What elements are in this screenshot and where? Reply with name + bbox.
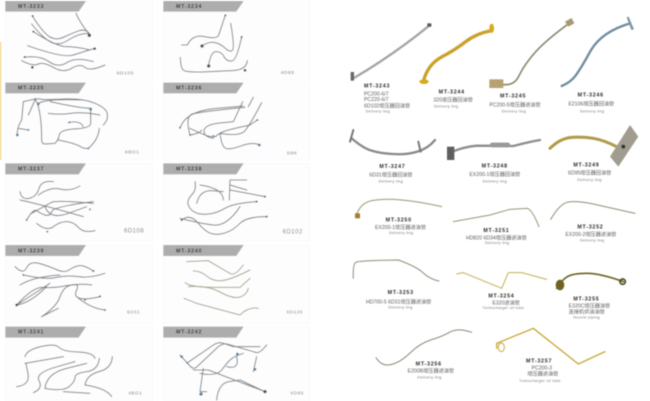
item: MT-3254 [457,273,547,310]
item: MT-3254: Turbocharger oil tube [482,306,524,310]
panel: MT-3239 [5,245,153,323]
item: MT-3257: 增压器进油管 [527,370,558,378]
panel: MT-3234 [163,1,310,80]
item: MT-3243: PC200-6/7 [364,91,389,97]
item: MT-3250 [355,199,442,235]
item: MT-3253: MT-3253 [388,290,414,296]
item: MT-3250: Delivery ling [389,231,413,235]
item: MT-3244: 320液压器回油管 [433,95,473,103]
item: MT-3243: Delivery ling [366,110,390,114]
accent strip [0,42,1,160]
panel: MT-3237: MT-3237 [18,167,44,173]
panel: MT-3235 [5,83,153,160]
item: MT-3244 [419,24,494,109]
panel: MT-3233: 6D105 [117,71,134,77]
panel: MT-3236 [163,83,310,160]
item: MT-3245: PC200-5增压器进油管 [489,100,541,108]
item: MT-3248: MT-3248 [482,164,508,170]
item: MT-3247: MT-3247 [379,164,406,170]
item: MT-3245: MT-3245 [500,94,526,100]
item: MT-3255: Nozzle piping [573,315,600,319]
item: MT-3257 [497,328,605,383]
item: MT-3244: MT-3244 [439,89,465,95]
item: MT-3247: 6D31增压器回油管 [369,171,413,179]
panel: MT-3239: MT-3239 [18,248,44,254]
item: MT-3253: Delivery ling [388,305,413,309]
panel: MT-3234: 4D95 [281,70,295,76]
panel: MT-3240: 6D125 [287,310,303,315]
item: MT-3246: MT-3246 [578,93,604,99]
item: MT-3252: Delivery ling [580,239,604,243]
panel: MT-3236: S6K [287,151,298,157]
panel: MT-3235: 6BD1 [125,150,139,156]
item: MT-3246: Delivery ling [580,109,604,113]
item: MT-3243: MT-3243 [364,83,390,89]
item: MT-3251: MT-3251 [483,228,510,234]
item: MT-3251: Delivery ling [485,241,509,245]
panel: MT-3242: 6D95 [291,391,304,396]
item: MT-3254: E320进油管 [492,298,520,306]
item: MT-3248: EX200-1增压器回油管 [469,170,520,178]
item: MT-3249 [550,125,638,182]
panel: MT-3242 [163,327,310,401]
item: MT-3251 [453,208,539,245]
item: MT-3243: PC220-6/7 [364,97,389,103]
item: MT-3256: MT-3256 [416,362,442,368]
panel: MT-3240: MT-3240 [176,248,202,254]
item: MT-3245 [489,18,574,113]
item: MT-3249: MT-3249 [573,162,600,168]
panel: MT-3233 [5,1,153,80]
item: MT-3255 [556,273,625,319]
item: MT-3243: 6D102增压器回油管 [364,101,410,109]
item: MT-3254: MT-3254 [488,293,515,299]
item: MT-3250: MT-3250 [386,218,412,224]
item: MT-3255: E320C增压器油管 [569,302,610,310]
item: MT-3252 [551,202,635,243]
panel: MT-3241 [5,327,153,401]
item: MT-3243 [351,23,431,114]
item: MT-3249: 6D95增压器回油管 [568,169,611,177]
panel: MT-3237: 6D108 [124,229,144,235]
item: MT-3252: MT-3252 [577,224,604,230]
item: MT-3245: Delivery ling [502,109,526,113]
item: MT-3250: EX200-1增压器进油管 [375,223,426,231]
panel: MT-3242: MT-3242 [176,330,202,336]
panel: MT-3241: 4BG1 [128,391,142,396]
panel: MT-3238: 6D102 [283,229,303,235]
panel: MT-3238 [163,163,310,242]
item: MT-3244: Delivery ling [434,105,458,109]
left catalogue: fuel pipe sets [5,1,310,401]
panel: MT-3239: 6D31 [127,310,140,315]
item: MT-3248: Delivery ling [483,179,507,183]
item: MT-3256: Delivery ling [417,375,442,379]
item: MT-3249: Delivery ling [577,178,602,182]
item: MT-3246: E2106增压器回油管 [568,99,614,107]
panel: MT-3233: MT-3233 [18,4,44,10]
panel: MT-3238: MT-3238 [176,167,202,173]
item: MT-3247 [350,130,435,183]
item: MT-3256: E200B增压器进油管 [408,367,454,375]
panel: MT-3240 [163,245,310,323]
item: MT-3256 [376,330,472,379]
item: MT-3252: EX200-2增压器进油管 [565,230,616,238]
item: MT-3257: MT-3257 [526,359,552,365]
panel: MT-3235: MT-3235 [18,86,44,92]
panel: MT-3236: MT-3236 [176,86,202,92]
right catalogue: oil pipes [350,17,638,383]
item: MT-3253: HD700-5 6D31增压器进油管 [366,298,431,306]
panel: MT-3241: MT-3241 [18,330,44,336]
item: MT-3253 [353,260,439,309]
item: MT-3255: MT-3255 [573,296,600,302]
item: MT-3247: Delivery ling [379,179,403,183]
panel: MT-3237 [5,163,153,242]
item: MT-3251: HD820 6D34增压器进油管 [466,233,527,241]
item: MT-3255: 连接机供油油管 [569,308,605,316]
item: MT-3246 [562,17,634,113]
item: MT-3257: Turbocharger oil tube [519,379,561,383]
panel: MT-3234: MT-3234 [176,4,202,10]
item: MT-3257: PC200-3 [532,365,552,371]
item: MT-3248 [447,140,540,183]
